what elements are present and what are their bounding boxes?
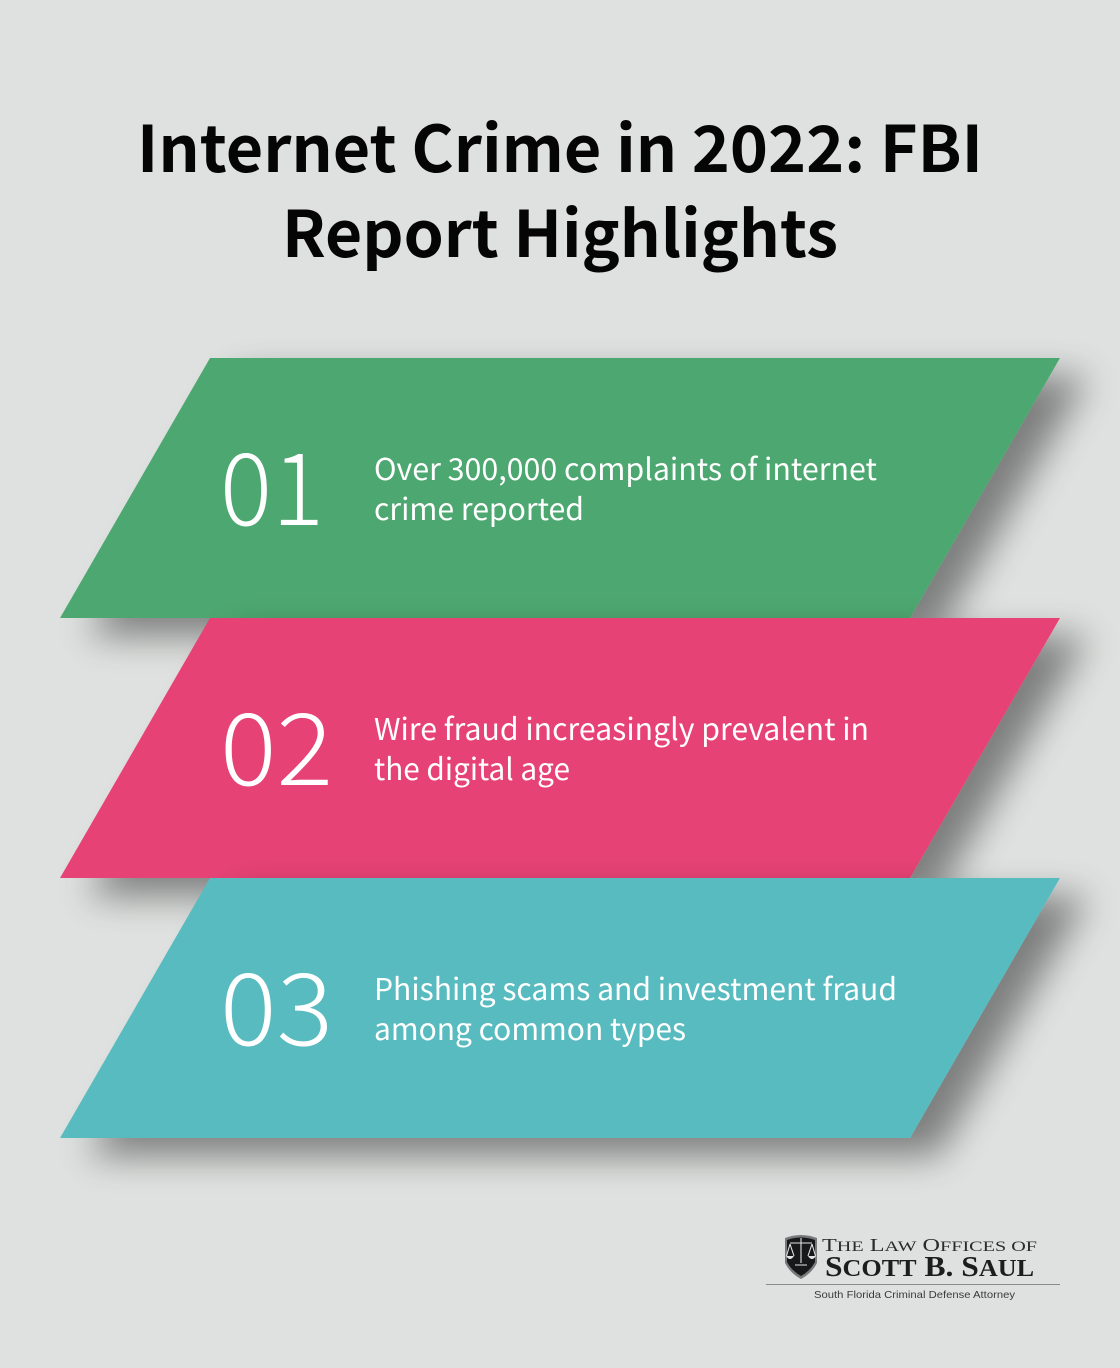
panel: item 02	[60, 618, 1060, 878]
logo	[766, 1235, 1060, 1301]
text: complaints: crime reported	[374, 485, 584, 529]
tagline: South Florida Criminal Defense Attorney	[814, 1289, 1016, 1301]
number 02: 02	[220, 669, 333, 814]
text: phishing: among common types	[374, 1005, 686, 1049]
number 01: 01	[220, 409, 324, 554]
text: wire fraud	[374, 705, 869, 789]
text: complaints: Over 300,000 complaints of internet	[374, 445, 877, 489]
title	[137, 99, 983, 276]
title: Report Highlights	[282, 184, 838, 276]
text: phishing: Phishing scams and investment fraud	[374, 965, 897, 1009]
logo: SCOTT B. SAUL	[825, 1251, 1034, 1283]
icon: shield with scales	[785, 1235, 817, 1279]
text: wire fraud: the digital age	[374, 745, 570, 789]
number 03: 03	[220, 929, 333, 1074]
panel: item 01	[60, 358, 1060, 618]
title: Internet Crime in 2022: FBI	[137, 99, 983, 191]
firm name: T HE L AW O FFICES OF	[822, 1235, 1037, 1255]
text: phishing	[374, 965, 897, 1049]
panel: item 03	[60, 878, 1060, 1138]
text: wire fraud: Wire fraud increasingly prevalent in	[374, 705, 869, 749]
text: complaints	[374, 445, 877, 529]
